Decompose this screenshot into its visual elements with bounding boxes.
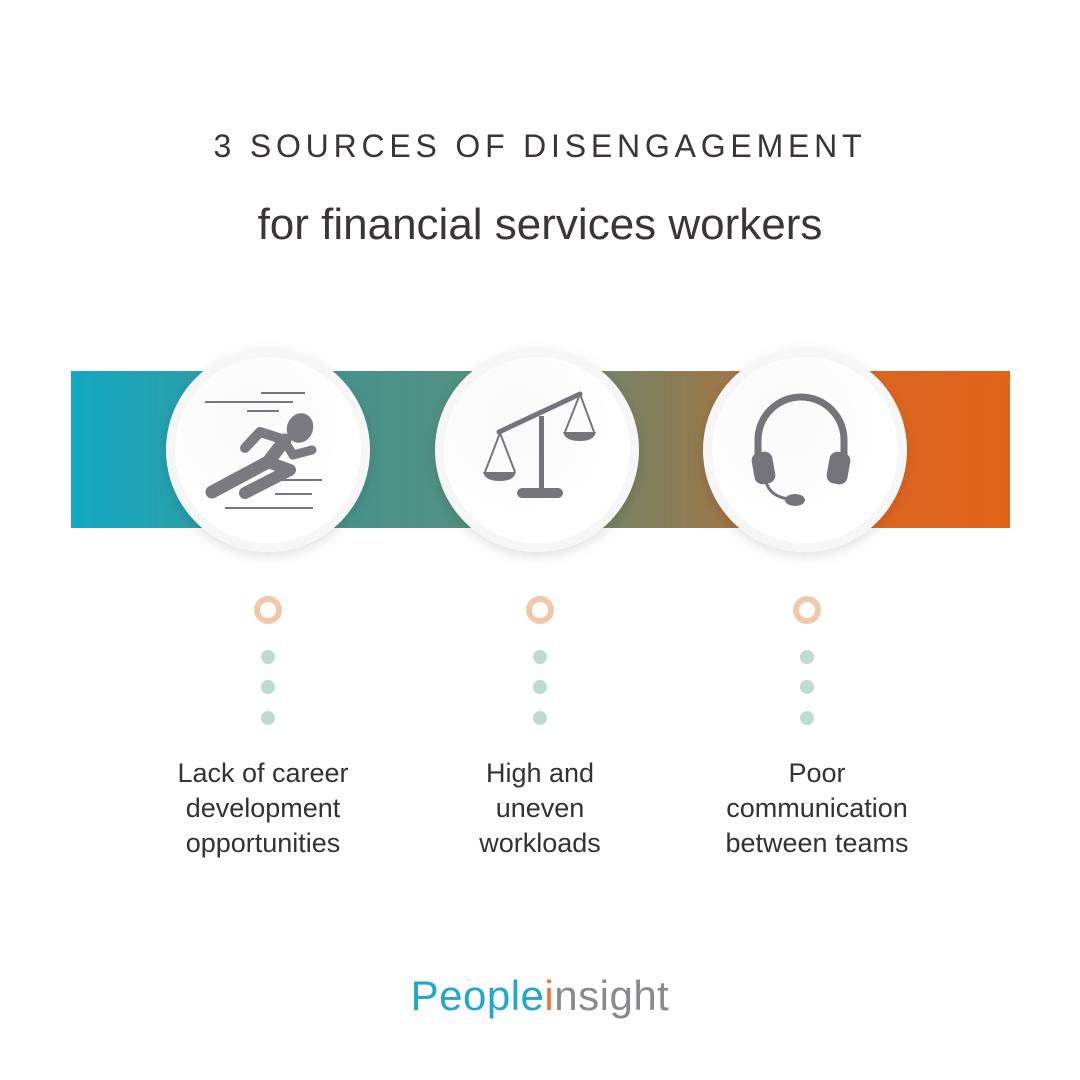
circle 1: runner: [166, 348, 370, 552]
label 2: [479, 758, 601, 858]
title: 3 SOURCES OF DISENGAGEMENT: [214, 128, 866, 164]
circle 2: scale: [435, 348, 639, 552]
subtitle: for financial services workers: [258, 200, 822, 249]
label 1: [177, 758, 349, 858]
label 1: opportunities: [186, 828, 340, 858]
label 1: development: [186, 793, 340, 823]
label 1: Lack of career: [177, 758, 349, 788]
label 3: communication: [726, 793, 908, 823]
label 3: [725, 758, 909, 858]
logo: Peopleinsight: [411, 972, 669, 1019]
label 3: between teams: [725, 828, 909, 858]
connectors: [257, 599, 818, 725]
label 2: workloads: [479, 828, 601, 858]
label 2: uneven: [496, 793, 584, 823]
gradient band: [71, 371, 1010, 528]
circle 3: headset: [703, 348, 907, 552]
label 3: Poor: [788, 758, 846, 788]
label 2: High and: [486, 758, 594, 788]
